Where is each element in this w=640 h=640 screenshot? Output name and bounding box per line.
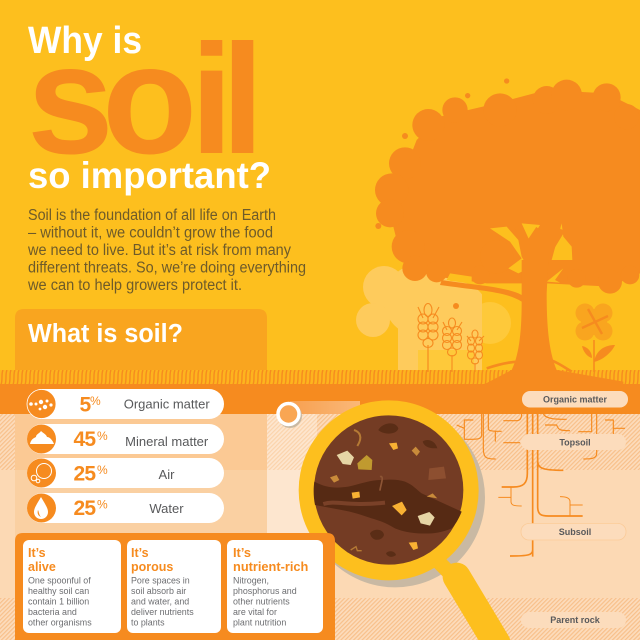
row: organic matter: Organic matter xyxy=(124,396,210,412)
layer label: subsoil xyxy=(521,524,626,540)
intro text: – without it, we couldn’t grow the food xyxy=(28,224,273,242)
heading: what is soil: What is soil? xyxy=(28,320,183,348)
canopy gap xyxy=(447,223,572,284)
row: air: Air xyxy=(159,467,175,482)
row: air xyxy=(27,458,224,488)
intro text: we can to help growers protect it. xyxy=(27,277,242,294)
title: so important? xyxy=(28,155,271,196)
card: nutrient-rich: It’s xyxy=(233,545,251,560)
layer label: topsoil: Topsoil xyxy=(559,438,591,448)
icon: wheat xyxy=(418,304,484,372)
card: nutrient-rich: other nutrients xyxy=(233,596,290,606)
row: air: 25 xyxy=(74,462,96,486)
card: alive: contain 1 billion xyxy=(28,596,89,606)
title: soil xyxy=(27,13,264,187)
card: alive: One spoonful of xyxy=(28,576,91,586)
row: air: % xyxy=(97,463,108,477)
card: alive: It’s xyxy=(28,546,46,560)
card: nutrient-rich: plant nutrition xyxy=(233,618,286,628)
row: water: 25 xyxy=(74,497,96,520)
icon: small lens ring xyxy=(278,404,302,428)
card: porous: It’s xyxy=(131,546,149,560)
card: alive xyxy=(23,540,121,633)
intro text: different threats. So, we’re doing everything xyxy=(28,260,306,276)
icon: flower xyxy=(576,304,615,372)
card: nutrient-rich: nutrient-rich xyxy=(233,559,309,574)
soil layers xyxy=(0,370,640,640)
card: nutrient-rich xyxy=(227,540,323,633)
icon: tree xyxy=(375,78,640,390)
card: porous xyxy=(127,540,221,633)
card: nutrient-rich: are vital for xyxy=(233,607,277,617)
row: mineral matter: % xyxy=(97,429,108,443)
card: porous: and water, and xyxy=(131,596,189,606)
card: porous: deliver nutrients xyxy=(131,607,194,617)
intro text: Soil is the foundation of all life on Earth xyxy=(28,207,276,224)
layer label: organic matter: Organic matter xyxy=(543,394,608,404)
row: organic matter xyxy=(27,389,224,419)
panel: what is soil xyxy=(15,309,267,540)
card: porous: porous xyxy=(131,560,173,574)
card: porous: to plants xyxy=(131,618,165,628)
card: nutrient-rich: Nitrogen, xyxy=(233,576,269,586)
intro text xyxy=(27,207,306,294)
panel: facts xyxy=(15,533,335,640)
row: mineral matter: Mineral matter xyxy=(125,434,209,449)
card: alive: other organisms xyxy=(28,618,92,628)
row: mineral matter xyxy=(27,424,224,454)
card: alive: healthy soil can xyxy=(28,586,89,596)
light beam xyxy=(267,401,360,534)
row: organic matter: 5 xyxy=(80,394,92,416)
card: porous: soil absorb air xyxy=(131,586,186,596)
row: water: % xyxy=(97,498,108,512)
row: water: Water xyxy=(149,501,184,516)
row: water xyxy=(27,493,224,523)
card: nutrient-rich: phosphorus and xyxy=(233,586,297,596)
lens soil xyxy=(314,415,463,565)
roots xyxy=(457,413,625,557)
icon: magnifier xyxy=(299,400,497,640)
card: alive: bacteria and xyxy=(28,607,77,617)
layer label: parent rock xyxy=(521,612,626,628)
row: mineral matter: 45 xyxy=(74,428,96,451)
trunk xyxy=(440,260,623,390)
layer label: parent rock: Parent rock xyxy=(550,615,601,625)
layer label: topsoil xyxy=(521,434,626,450)
bush backdrop xyxy=(356,264,511,370)
layer label: organic matter xyxy=(522,391,628,408)
card: porous: Pore spaces in xyxy=(131,576,190,586)
intro text: we need to live. But it’s at risk from many xyxy=(27,242,291,259)
row: organic matter: % xyxy=(90,394,101,408)
layer label: subsoil: Subsoil xyxy=(559,527,591,537)
card: alive: alive xyxy=(28,560,56,574)
title: Why is xyxy=(28,20,142,62)
